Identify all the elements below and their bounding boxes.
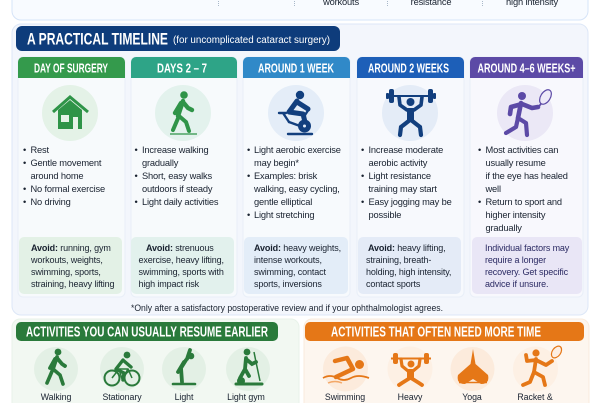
bullet list: • xyxy=(23,145,26,155)
bullet list xyxy=(478,145,568,233)
panel: practical timeline xyxy=(12,24,588,315)
bullet list: Gentle movement xyxy=(30,158,102,168)
bullet list: well xyxy=(484,184,501,194)
advice box: require a longer xyxy=(485,255,546,265)
heading: a practical timeline: (for uncomplicated cataract surgery) xyxy=(173,35,330,46)
bullet list: • xyxy=(23,184,26,194)
bullet list: Most activities can xyxy=(486,145,558,155)
icon: yoga xyxy=(450,347,494,391)
icon: stretching xyxy=(162,347,206,391)
bullet list: Short, easy walks xyxy=(142,171,212,181)
icon: cycling xyxy=(100,347,144,391)
panel: activities needing more time xyxy=(304,319,589,403)
card header xyxy=(357,57,464,78)
bullet list: • xyxy=(23,158,26,168)
label: yoga: Yoga xyxy=(462,392,482,402)
heading xyxy=(16,322,278,341)
bullet list: if the eye has healed xyxy=(486,171,568,181)
label: racket: Racket & xyxy=(517,392,553,402)
avoid box: high impact risk xyxy=(138,279,200,289)
avoid box xyxy=(131,237,234,294)
bullet list xyxy=(247,145,341,220)
bullet list: • xyxy=(134,171,138,181)
bullet list: • xyxy=(361,197,364,207)
panel: activities resumed earlier xyxy=(12,319,299,403)
bullet list: gradually xyxy=(142,158,179,168)
bullet list: Increase moderate xyxy=(368,145,443,155)
bullet list: • xyxy=(247,210,250,220)
bullet list: • xyxy=(361,171,364,181)
bullet list: • xyxy=(361,145,364,155)
avoid box xyxy=(244,237,348,294)
bullet list: Light stretching xyxy=(254,210,314,220)
icon: racket sports xyxy=(513,344,564,392)
label: walking: Walking xyxy=(41,392,71,402)
avoid box: contact sports xyxy=(366,279,421,289)
bullet list: outdoors if steady xyxy=(142,184,213,194)
bullet list: Light daily activities xyxy=(142,197,219,207)
advice box: advice if unsure. xyxy=(485,279,548,289)
bullet list: Return to sport and xyxy=(486,197,562,207)
label: light gym: Light gym xyxy=(227,392,265,402)
bullet list: • xyxy=(478,145,481,155)
icon: swimming xyxy=(323,346,369,392)
bullet list: Examples: brisk xyxy=(254,171,318,181)
footnote: *Only after a satisfactory postoperative review and if your ophthalmologist agrees. xyxy=(131,303,443,313)
avoid box: Avoid: strenuous xyxy=(146,243,214,253)
avoid box: Avoid: heavy lifting, xyxy=(368,243,445,253)
label: swimming: Swimming xyxy=(325,392,365,402)
avoid box: Avoid: heavy weights, xyxy=(254,243,341,253)
bullet list: around home xyxy=(30,171,83,181)
label: heavy: Heavy xyxy=(398,392,423,402)
avoid box: intense workouts, xyxy=(254,255,322,265)
icon: walking xyxy=(34,347,78,391)
bullet list: possible xyxy=(368,210,401,220)
icon: house xyxy=(42,85,98,141)
icon: weightlifter xyxy=(382,85,438,141)
bullet list: No formal exercise xyxy=(30,184,105,194)
bullet list: • xyxy=(134,145,138,155)
card header: AROUND 2 WEEKS xyxy=(368,62,449,76)
bullet list: gentle elliptical xyxy=(254,197,312,207)
avoid box: straining, breath- xyxy=(366,255,431,265)
top labels xyxy=(322,0,558,7)
advice box xyxy=(472,237,582,294)
avoid box: swimming, sports with xyxy=(138,267,224,277)
icon: heavy weights xyxy=(388,346,432,392)
icon: stationary bike xyxy=(268,85,324,141)
bullet list: No driving xyxy=(30,197,71,207)
heading: ACTIVITIES YOU CAN USUALLY RESUME EARLIER xyxy=(26,324,268,340)
card header xyxy=(131,57,237,78)
bullet list xyxy=(361,145,452,220)
avoid box xyxy=(19,237,122,294)
bullet list: Easy jogging may be xyxy=(368,197,452,207)
bullet list: Increase walking xyxy=(142,145,209,155)
card header: AROUND 1 WEEK xyxy=(258,62,334,76)
avoid box: Avoid: running, gym xyxy=(31,243,111,253)
card header xyxy=(243,57,350,78)
bullet list: • xyxy=(247,171,250,181)
bullet list xyxy=(134,145,219,207)
card header: DAY OF SURGERY xyxy=(34,62,108,76)
bullet list: higher intensity xyxy=(486,210,546,220)
card: around 2 weeks xyxy=(357,57,464,297)
heading: a practical timeline xyxy=(16,26,340,51)
bullet list: • xyxy=(23,197,26,207)
card header xyxy=(470,57,583,78)
bullet list: usually resume xyxy=(486,158,546,168)
icon: walking person xyxy=(155,85,211,141)
avoid box xyxy=(358,237,461,294)
heading: a practical timeline: A PRACTICAL TIMELINE xyxy=(27,30,168,48)
avoid box: workouts, weights, xyxy=(30,255,103,265)
bullet list: Light aerobic exercise xyxy=(254,145,341,155)
icon: gym machine xyxy=(226,347,270,391)
icon: tennis player xyxy=(497,85,554,141)
avoid box: holding, high intensity, xyxy=(366,267,451,277)
bullet list: • xyxy=(478,197,481,207)
card: around 1 week xyxy=(243,57,350,297)
bullet list: Rest xyxy=(30,145,50,155)
card header xyxy=(18,57,125,78)
label: stationary: Stationary xyxy=(102,392,142,402)
bullet list: may begin* xyxy=(254,158,299,168)
avoid box: swimming, sports, xyxy=(31,267,101,277)
label: light: Light xyxy=(175,392,194,402)
avoid box: straining, heavy lifting xyxy=(31,279,115,289)
card: around 4-6 weeks xyxy=(470,57,583,297)
card header: DAYS 2 – 7 xyxy=(157,62,207,76)
bullet list: • xyxy=(134,197,138,207)
panel: top section remainder xyxy=(12,0,588,20)
bullet list: training may start xyxy=(368,184,437,194)
bullet list: walking, easy cycling, xyxy=(253,184,340,194)
advice box: recovery. Get specific xyxy=(485,267,569,277)
bullet list: Light resistance xyxy=(368,171,431,181)
bullet list xyxy=(23,145,105,207)
avoid box: swimming, contact xyxy=(254,267,326,277)
avoid box: sports, inversions xyxy=(254,279,322,289)
bullet list: aerobic activity xyxy=(368,158,428,168)
card: day of surgery xyxy=(18,57,125,297)
card: days 2-7 xyxy=(131,57,237,297)
advice box: Individual factors may xyxy=(485,243,570,253)
bullet list: • xyxy=(247,145,250,155)
avoid box: exercise, heavy lifting, xyxy=(138,255,224,265)
bullet list: gradually xyxy=(486,223,522,233)
